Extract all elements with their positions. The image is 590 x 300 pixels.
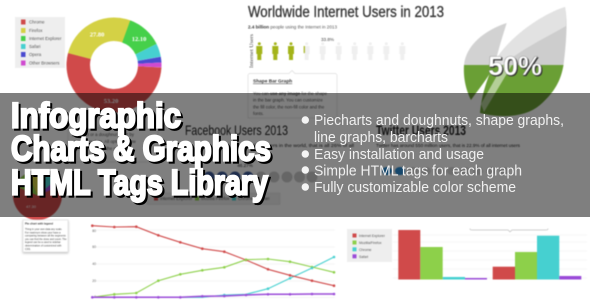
pie tooltip: Thing in your own data any scale. bbox=[25, 228, 63, 231]
doughnut tooltip: pie chart or a doughnut chart by bbox=[72, 132, 135, 137]
bar chart bbox=[393, 228, 587, 280]
pie tooltip: you can find the close and count. The bbox=[25, 238, 67, 241]
bar chart legend: Chrome bbox=[359, 248, 372, 252]
doughnut legend: Chrome bbox=[29, 20, 45, 24]
doughnut legend: Safari bbox=[29, 44, 40, 49]
pie tooltip: legend can be a used to sidebar bbox=[25, 241, 61, 244]
twitter icons bbox=[382, 167, 509, 175]
feature bullet list: Simple HTML tags for each graph bbox=[314, 164, 522, 180]
pie tooltip: For maximum show your have a bbox=[25, 231, 61, 234]
feature bullet list: line graphs, barcharts bbox=[314, 130, 448, 146]
line chart bbox=[91, 224, 335, 299]
heading: facebook users: Facebook Users 2013 bbox=[185, 122, 288, 138]
doughnut legend: Opera bbox=[29, 52, 42, 57]
doughnut legend: Firefox bbox=[29, 28, 43, 33]
doughnut tooltip: using your data. All options allow bbox=[72, 139, 137, 144]
shape bar graph of people bbox=[256, 42, 405, 60]
percentage text: 50% bbox=[488, 51, 542, 81]
tooltip: shape bar graph: Shape Bar Graph bbox=[253, 78, 292, 84]
doughnut tooltip: you to customize the color and bbox=[72, 146, 132, 151]
facebook statistic: 1.15 billion users in the world, that is all 26% of all bbox=[238, 143, 354, 148]
percentage label: 33.8% bbox=[321, 37, 334, 42]
pie tooltip: Pie chart with legend bbox=[25, 222, 53, 226]
feature bullet list: Piecharts and doughnuts, shape graphs, bbox=[314, 113, 564, 129]
doughnut tooltip bbox=[68, 128, 158, 162]
pie tooltip: comparing between all the segments bbox=[25, 235, 66, 238]
facebook legend: Chrome bbox=[238, 196, 254, 201]
line chart: 40 bbox=[92, 262, 96, 266]
leaf fill gauge bbox=[464, 7, 567, 116]
doughnut legend: Internet Explorer bbox=[29, 36, 62, 41]
bar chart legend bbox=[347, 229, 392, 262]
doughnut chart: 12.10 bbox=[132, 36, 146, 43]
internet users statistic: 2.4 billion people using the Internet in 2013 bbox=[248, 24, 337, 30]
line chart: 0 bbox=[94, 295, 96, 299]
facebook legend bbox=[147, 193, 280, 204]
axis label: Internet Users bbox=[250, 34, 255, 68]
feature bullet list: Easy installation and usage bbox=[314, 147, 484, 163]
facebook legend: Mozilla Firefox bbox=[201, 196, 230, 201]
main title bbox=[11, 96, 271, 202]
tooltip: shape bar graph: fonts. bbox=[253, 111, 264, 116]
main title: Infographic bbox=[11, 96, 181, 136]
main title: HTML Tags Library bbox=[11, 164, 268, 202]
dark translucent banner bbox=[0, 93, 590, 217]
feature bullet list bbox=[302, 113, 564, 196]
bar chart legend: Internet Explorer bbox=[359, 234, 386, 238]
pie tooltip: determination of customized with bbox=[25, 244, 62, 248]
facebook legend: Internet Explorer bbox=[160, 196, 193, 201]
small pie chart: 47.30 bbox=[26, 204, 37, 209]
pie tooltip: CSS. bbox=[25, 248, 31, 251]
facebook icons bbox=[204, 172, 318, 182]
tooltip: shape bar graph: You can use any image for the shape bbox=[253, 91, 328, 96]
tooltip edge bbox=[470, 228, 548, 232]
line chart: 80 bbox=[92, 229, 96, 233]
heading: worldwide internet users: Worldwide Internet Users in 2013 bbox=[248, 4, 444, 21]
doughnut chart bbox=[66, 17, 162, 113]
tooltip: shape bar graph: in the bar graph. You can customize bbox=[253, 98, 323, 102]
line chart: 20 bbox=[92, 279, 96, 283]
doughnut legend: Other Browsers bbox=[29, 60, 60, 66]
twitter statistic: Twitter has around 550 million users, that is 22.9% of all internet users bbox=[376, 143, 521, 148]
doughnut chart: 53.20 bbox=[104, 98, 118, 105]
facebook percentage label: 46.27% bbox=[237, 163, 253, 168]
doughnut legend bbox=[15, 17, 65, 68]
facebook legend: Safari bbox=[258, 196, 269, 201]
small pie chart bbox=[13, 171, 62, 220]
feature bullet list: Fully customizable color scheme bbox=[314, 180, 516, 196]
tooltip: shape bar graph bbox=[248, 70, 337, 118]
doughnut chart: 27.80 bbox=[90, 32, 104, 38]
bar chart legend: Safari bbox=[359, 255, 368, 259]
heading: twitter users: Twitter Users 2013 bbox=[376, 122, 466, 138]
bar chart legend: Mozilla/Firefox bbox=[359, 241, 382, 245]
pie tooltip bbox=[23, 220, 68, 252]
tooltip: shape bar graph: the fill color, the non-fill color and the bbox=[253, 104, 325, 110]
line chart: 60 bbox=[92, 245, 96, 249]
main title: Charts & Graphics bbox=[11, 130, 271, 168]
